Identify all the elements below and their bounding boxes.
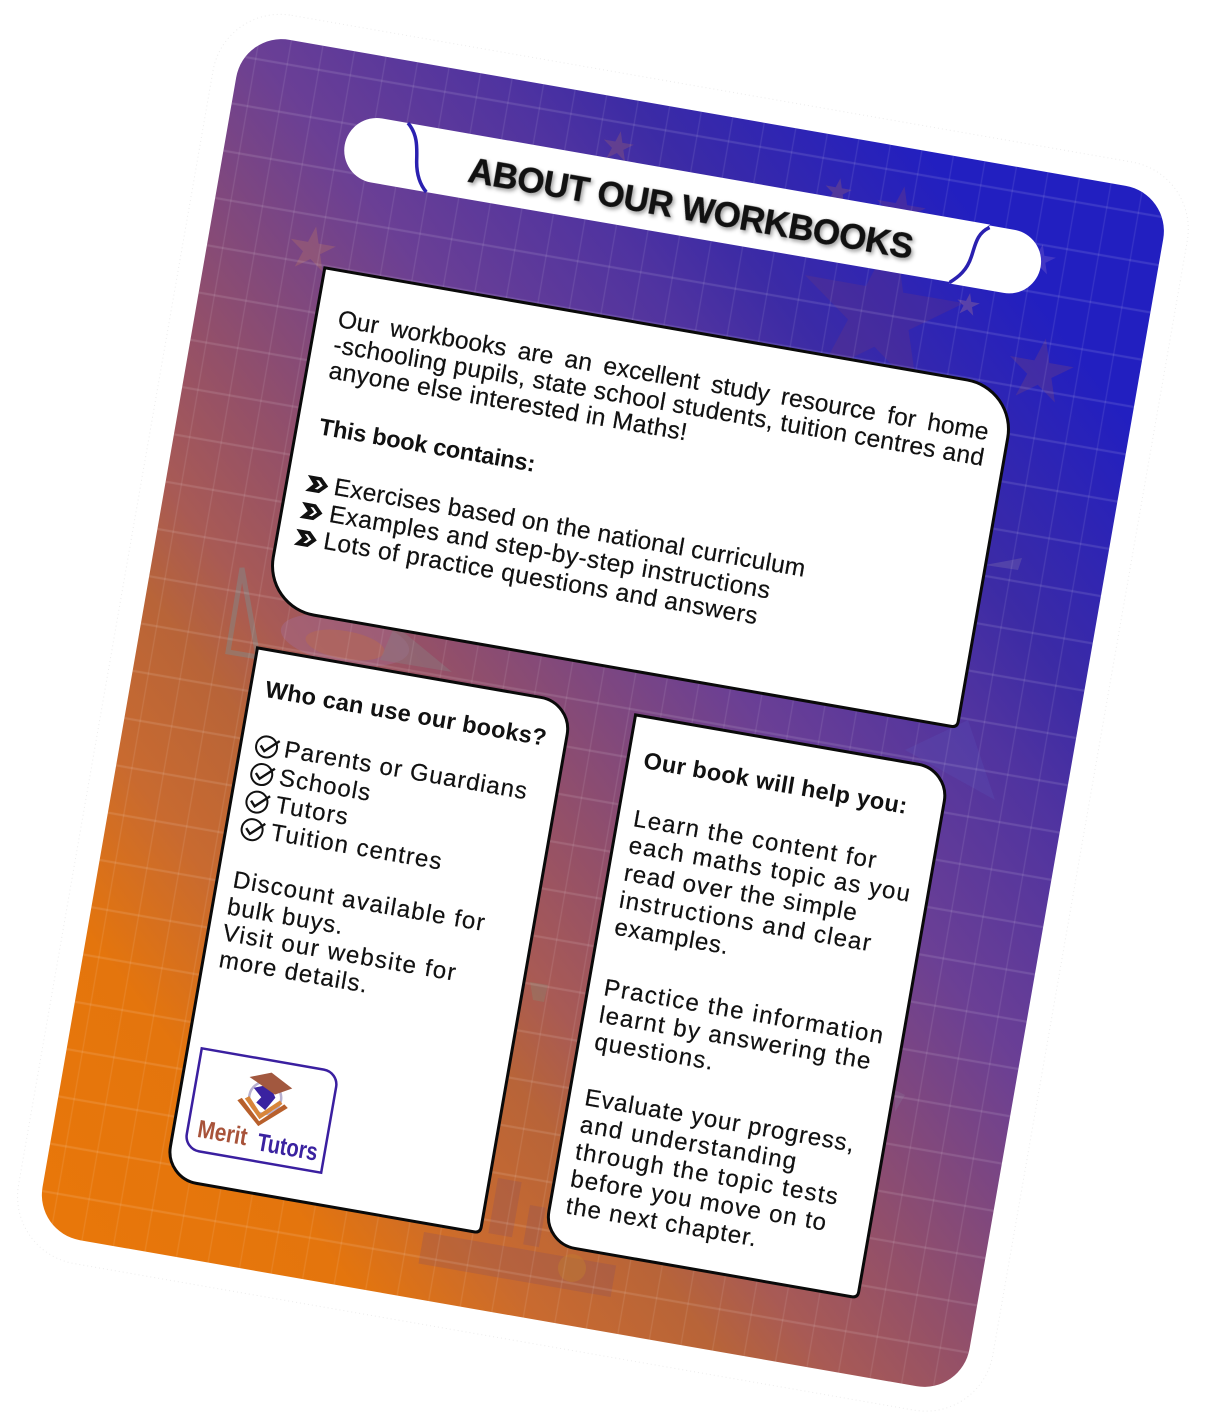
paragraph: learn: read over the simple: [622, 860, 859, 927]
audience checklist: Tuition centres: [269, 819, 444, 876]
paragraph: evaluate: before you move on to: [569, 1165, 828, 1237]
intro paragraph: Our workbooks are an excellent study resource for home: [336, 306, 991, 446]
title: ABOUT OUR WORKBOOKS: [465, 151, 916, 267]
paragraph: practice: [592, 974, 885, 1104]
coins illustration: [418, 1178, 616, 1297]
paragraph: evaluate: the next chapter.: [564, 1192, 759, 1252]
audience checklist: Tutors: [273, 792, 350, 831]
discount note: more details.: [217, 946, 369, 999]
audience checklist: Schools: [277, 764, 372, 807]
contents list: Exercises based on the national curriculum: [332, 474, 807, 583]
paragraph: evaluate: Evaluate your progress,: [583, 1084, 856, 1158]
logo: Merit Tutors: Merit: [195, 1115, 250, 1151]
discount note: bulk buys.: [225, 893, 345, 940]
paragraph: learn: instructions and clear: [617, 887, 873, 957]
paragraph: learn: examples.: [612, 914, 730, 960]
paragraph: evaluate: [564, 1084, 856, 1266]
panel: who can use our books: [165, 648, 573, 1233]
title banner: [339, 113, 1046, 298]
intro paragraph: anyone else interested in Maths!: [327, 357, 689, 446]
discount note: Discount available for: [231, 866, 487, 937]
paragraph: practice: questions.: [592, 1028, 715, 1076]
contents list: Lots of practice questions and answers: [321, 528, 760, 630]
heading: Our book will help you:: [642, 747, 909, 819]
paragraph: practice: learnt by answering the: [597, 1001, 873, 1075]
audience checklist: Parents or Guardians: [282, 736, 529, 805]
paragraph: evaluate: through the topic tests: [573, 1138, 840, 1211]
icon: graduation book and globe: [234, 1068, 294, 1131]
audience checklist: [240, 731, 529, 888]
contents list: Examples and step-by-step instructions: [327, 501, 772, 604]
intro paragraph: -schooling pupils, state school students, tuition centres and: [331, 332, 986, 472]
contents heading: This book contains:: [317, 413, 537, 477]
paragraph: learn: [612, 805, 917, 989]
panel: how the book helps: [543, 715, 950, 1298]
contents list: [293, 469, 807, 637]
decorative stars and maths shapes: [228, 129, 1078, 1297]
discount note: [216, 866, 487, 1017]
logo: Merit Tutors: Tutors: [255, 1128, 320, 1167]
discount note: Visit our website for: [221, 919, 458, 987]
panel: introduction and contents: [265, 268, 1016, 727]
heading: Who can use our books?: [263, 676, 549, 751]
paragraph: evaluate: and understanding: [578, 1111, 798, 1175]
paragraph: practice: Practice the information: [602, 974, 885, 1050]
paragraph: learn: Learn the content for: [631, 805, 878, 874]
logo: Merit Tutors: [184, 1048, 339, 1173]
paragraph: learn: each maths topic as you: [627, 832, 912, 908]
